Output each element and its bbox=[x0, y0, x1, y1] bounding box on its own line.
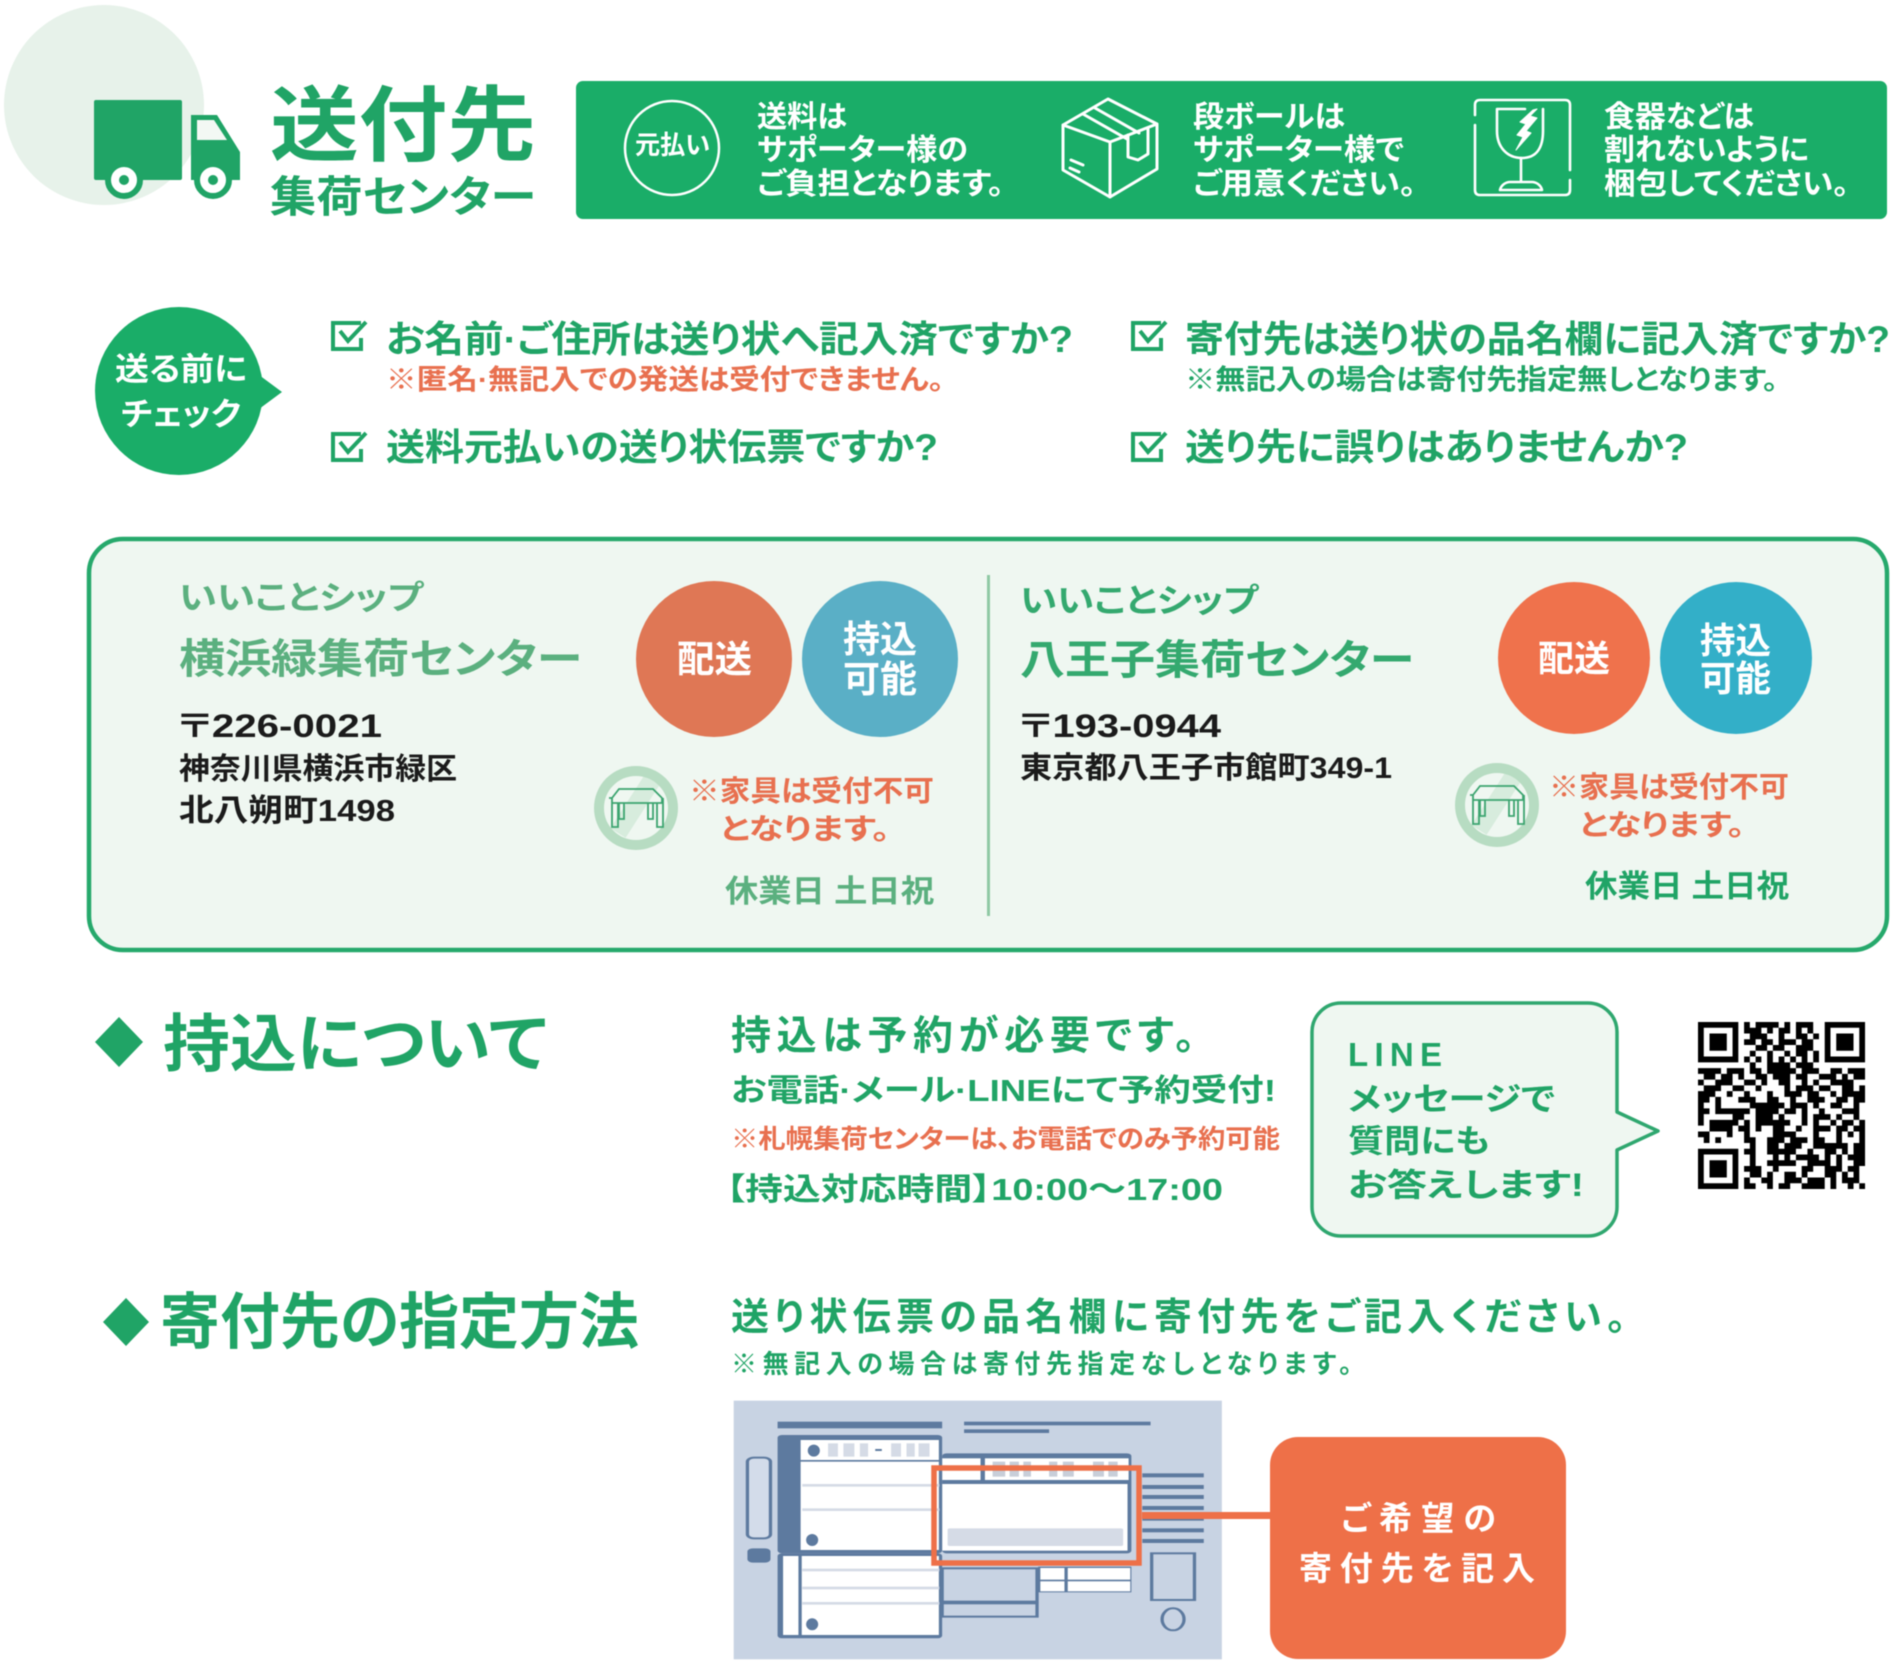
badge: check before sending bbox=[95, 307, 282, 475]
callout: write desired recipient: 寄付先を記入 bbox=[1299, 1550, 1535, 1587]
badge: drop-off available bbox=[1660, 582, 1812, 734]
closed days: 休業日 土日祝 bbox=[1585, 869, 1789, 904]
icon: no furniture bbox=[599, 771, 673, 845]
check item: destination: 送り先に誤りはありませんか? bbox=[1185, 427, 1688, 468]
title bbox=[270, 81, 536, 222]
check item: prepaid slip: 送料元払いの送り状伝票ですか? bbox=[386, 427, 938, 468]
heading: about drop-off: 持込について bbox=[163, 1010, 547, 1080]
center: Yokohama Midori: 横浜緑集荷センター bbox=[179, 636, 582, 682]
center: Yokohama Midori: 神奈川県横浜市緑区 bbox=[179, 753, 457, 786]
center: Hachioji: 東京都八王子市館町349-1 bbox=[1020, 752, 1392, 785]
check item: name and address: お名前·ご住所は送り状へ記入済ですか? bbox=[386, 319, 1073, 360]
text: drop-off details: 持込は予約が必要です。 bbox=[731, 1014, 1195, 1058]
note: anonymous not accepted: ※匿名·無記入での発送は受付できません。 bbox=[386, 364, 944, 395]
center: Hachioji: 八王子集荷センター bbox=[1020, 637, 1414, 683]
badge: delivery: 配送 bbox=[677, 639, 752, 680]
badge: drop-off available bbox=[802, 581, 958, 737]
panel: shipping notes bar bbox=[576, 81, 1887, 219]
text: shipping fee note: 送料は bbox=[757, 101, 847, 134]
icon: prepaid circle bbox=[625, 101, 719, 195]
icon: prepaid circle: 元払い bbox=[635, 130, 710, 160]
heading: how to specify recipient: 寄付先の指定方法 bbox=[160, 1288, 639, 1356]
badge: check before sending: チェック bbox=[121, 396, 241, 432]
check item: donation recipient: 寄付先は送り状の品名欄に記入済ですか? bbox=[1185, 319, 1890, 360]
text: shipping fee note bbox=[757, 101, 1004, 201]
center: Hachioji: となります。 bbox=[1579, 810, 1745, 842]
icon: cardboard box bbox=[1063, 99, 1157, 197]
badge: drop-off available: 可能 bbox=[1700, 658, 1771, 699]
badge: drop-off available: 可能 bbox=[843, 659, 917, 700]
text: fragile note bbox=[1604, 101, 1849, 201]
icon: fragile glass bbox=[1475, 100, 1570, 195]
callout: write desired recipient bbox=[1270, 1437, 1566, 1659]
badge: delivery bbox=[1498, 582, 1650, 734]
text: box note bbox=[1193, 101, 1416, 201]
text: shipping fee note: ご負担となります。 bbox=[757, 167, 1004, 201]
text: fragile note: 梱包してください。 bbox=[1604, 168, 1849, 201]
title: 集荷センター bbox=[270, 174, 536, 222]
icon: checkbox 2 bbox=[333, 433, 366, 460]
highlight frame on slip bbox=[934, 1468, 1139, 1563]
icon: no furniture bbox=[1460, 768, 1534, 842]
text: drop-off details: ※札幌集荷センターは、お電話でのみ予約可能 bbox=[731, 1124, 1280, 1154]
text: recipient instructions: ※無記入の場合は寄付先指定なしとなります。 bbox=[731, 1349, 1352, 1379]
icon: checkbox 1 bbox=[333, 322, 366, 349]
center: Hachioji bbox=[1019, 582, 1812, 904]
text: fragile note: 食器などは bbox=[1604, 101, 1754, 134]
center: Yokohama Midori: 北八朔町1498 bbox=[179, 793, 395, 828]
note: furniture not accepted: ※家具は受付不可 bbox=[1549, 771, 1789, 804]
callout: LINE speech bubble bbox=[1312, 1003, 1658, 1236]
panel: collection centers bbox=[89, 539, 1887, 950]
illustration: shipping slip bbox=[734, 1401, 1222, 1659]
text: recipient instructions: 送り状伝票の品名欄に寄付先をご記入ください。 bbox=[731, 1297, 1626, 1339]
text: fragile note: 割れないように bbox=[1604, 134, 1809, 167]
header: truck icon on pale circle bbox=[4, 5, 240, 205]
checklist bbox=[333, 319, 1890, 468]
text: drop-off details: 【持込対応時間】10:00〜17:00 bbox=[726, 1172, 1223, 1207]
text: box note: ご用意ください。 bbox=[1193, 167, 1416, 201]
center: Yokohama Midori: となります。 bbox=[720, 814, 890, 846]
icon: checkbox 3 bbox=[1133, 322, 1166, 349]
callout: LINE speech bubble: 質問にも bbox=[1348, 1123, 1490, 1159]
text: recipient instructions bbox=[731, 1297, 1626, 1379]
badge: check before sending: 送る前に bbox=[115, 351, 247, 387]
title: 送付先 bbox=[270, 81, 536, 172]
badge: delivery bbox=[636, 581, 792, 737]
center: Yokohama Midori: いいことシップ bbox=[179, 579, 425, 616]
note: no recipient specified: ※無記入の場合は寄付先指定無しとなります。 bbox=[1185, 364, 1778, 395]
callout: write desired recipient: ご希望の bbox=[1341, 1500, 1496, 1537]
center: Yokohama Midori: 〒226-0021 bbox=[178, 708, 382, 744]
center: Hachioji: いいことシップ bbox=[1020, 582, 1260, 619]
text: shipping fee note: サポーター様の bbox=[757, 134, 968, 167]
callout: LINE speech bubble: お答えします! bbox=[1348, 1167, 1584, 1203]
text: drop-off details: お電話·メール·LINEにて予約受付! bbox=[731, 1073, 1276, 1108]
closed days: 休業日 土日祝 bbox=[725, 874, 934, 909]
callout: LINE speech bubble: LINE bbox=[1348, 1036, 1442, 1073]
icon: checkbox 4 bbox=[1133, 433, 1166, 460]
callout: LINE speech bubble: メッセージで bbox=[1348, 1081, 1555, 1117]
center: Yokohama Midori bbox=[178, 579, 958, 909]
center: Hachioji: 〒193-0944 bbox=[1019, 708, 1221, 744]
note: furniture not accepted: ※家具は受付不可 bbox=[689, 775, 934, 808]
text: box note: サポーター様で bbox=[1193, 134, 1404, 167]
badge: delivery: 配送 bbox=[1538, 638, 1610, 679]
badge: drop-off available: 持込 bbox=[1700, 620, 1771, 661]
QR code bbox=[1698, 1025, 1865, 1186]
callout connector line bbox=[1142, 1512, 1271, 1519]
text: drop-off details bbox=[726, 1014, 1280, 1207]
text: box note: 段ボールは bbox=[1193, 101, 1345, 134]
badge: drop-off available: 持込 bbox=[843, 619, 917, 660]
